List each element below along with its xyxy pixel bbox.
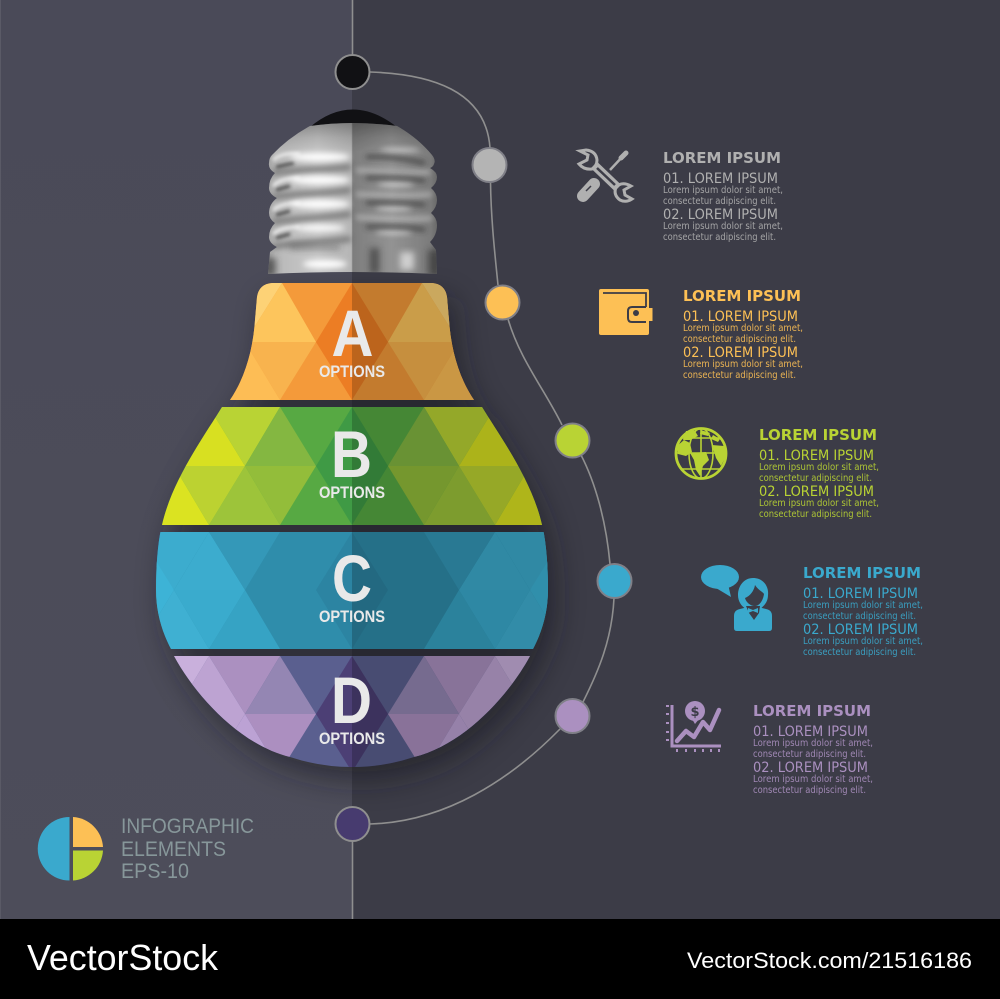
label D: OPTIONS: [319, 729, 385, 748]
text block 1: Lorem ipsum dolor sit amet,: [663, 221, 783, 232]
label D: D: [331, 663, 372, 737]
text block 5: LOREM IPSUM: [753, 702, 871, 720]
text block 2: LOREM IPSUM: [683, 287, 801, 305]
label C: [319, 541, 385, 626]
node: purple: [556, 699, 590, 733]
text block 4: consectetur adipiscing elit.: [803, 611, 916, 622]
text block 4: [803, 564, 923, 658]
background: right panel: [352, 0, 1000, 919]
metal screw base: [268, 123, 437, 274]
bulb shadow: [164, 297, 556, 781]
text block 1: LOREM IPSUM: [663, 149, 781, 167]
node: gray: [472, 148, 506, 182]
text block 3: Lorem ipsum dolor sit amet,: [759, 462, 879, 473]
text block 5: 01. LOREM IPSUM: [753, 724, 868, 740]
icon: legend pie: [38, 817, 103, 880]
text block 4: LOREM IPSUM: [803, 564, 921, 582]
legend text: INFOGRAPHIC: [121, 815, 254, 838]
text block 2: consectetur adipiscing elit.: [683, 334, 796, 345]
text block 2: Lorem ipsum dolor sit amet,: [683, 323, 803, 334]
icon: person with speech bubble: [701, 565, 772, 631]
label A: A: [332, 296, 374, 370]
text block 2: Lorem ipsum dolor sit amet,: [683, 359, 803, 370]
text block 5: Lorem ipsum dolor sit amet,: [753, 774, 873, 785]
text block 3: Lorem ipsum dolor sit amet,: [759, 498, 879, 509]
light bulb socket: [264, 110, 442, 278]
bulb band A: [230, 283, 474, 400]
label D: [319, 663, 385, 748]
label B: OPTIONS: [319, 483, 385, 502]
text block 5: Lorem ipsum dolor sit amet,: [753, 738, 873, 749]
left grooves: [272, 167, 351, 247]
text block 5: consectetur adipiscing elit.: [753, 785, 866, 796]
text block 2: consectetur adipiscing elit.: [683, 370, 796, 381]
bulb band B: [162, 407, 542, 525]
label A: OPTIONS: [319, 362, 385, 381]
legend text: EPS-10: [121, 860, 189, 883]
text block 2: 01. LOREM IPSUM: [683, 309, 798, 325]
text block 4: Lorem ipsum dolor sit amet,: [803, 636, 923, 647]
bulb band C: [156, 532, 548, 649]
label A: [319, 296, 385, 381]
text block 5: consectetur adipiscing elit.: [753, 749, 866, 760]
legend text: [121, 815, 254, 883]
node: top black: [336, 55, 370, 89]
node: orange: [486, 286, 520, 320]
text block 4: consectetur adipiscing elit.: [803, 647, 916, 658]
text block 3: LOREM IPSUM: [759, 426, 877, 444]
text block 2: [683, 287, 803, 381]
text block 3: 02. LOREM IPSUM: [759, 484, 874, 500]
footer bar: [0, 919, 1000, 999]
icon: growth chart: $: [690, 705, 700, 720]
text block 1: Lorem ipsum dolor sit amet,: [663, 185, 783, 196]
background: left panel: [0, 0, 352, 919]
text block 5: [753, 702, 873, 796]
icon: wallet: [599, 289, 652, 335]
right half: [352, 123, 437, 274]
collar shading: [264, 246, 440, 276]
text block 4: Lorem ipsum dolor sit amet,: [803, 600, 923, 611]
timeline connector line: [352, 0, 614, 919]
label C: OPTIONS: [319, 607, 385, 626]
text block 1: consectetur adipiscing elit.: [663, 196, 776, 207]
node: bottom indigo: [336, 807, 370, 841]
socket contact dome: [310, 110, 397, 127]
text block 4: 02. LOREM IPSUM: [803, 622, 918, 638]
text block 1: 02. LOREM IPSUM: [663, 207, 778, 223]
icon: growth chart: [666, 701, 721, 752]
watermark right: VectorStock.com/21516186: [687, 948, 972, 973]
icon: globe: [676, 428, 726, 478]
text block 4: 01. LOREM IPSUM: [803, 586, 918, 602]
text block 3: 01. LOREM IPSUM: [759, 448, 874, 464]
bulb band D: [174, 656, 530, 767]
icon: tools: [579, 150, 632, 201]
label B: [319, 417, 385, 502]
label B: B: [331, 417, 372, 491]
legend text: ELEMENTS: [121, 838, 226, 861]
text block 5: 02. LOREM IPSUM: [753, 760, 868, 776]
node: blue: [598, 564, 632, 598]
text block 3: [759, 426, 879, 520]
watermark left: VectorStock: [27, 937, 219, 978]
text block 2: 02. LOREM IPSUM: [683, 345, 798, 361]
text block 1: 01. LOREM IPSUM: [663, 171, 778, 187]
label C: C: [332, 541, 372, 615]
text block 3: consectetur adipiscing elit.: [759, 473, 872, 484]
text block 1: consectetur adipiscing elit.: [663, 232, 776, 243]
text block 3: consectetur adipiscing elit.: [759, 509, 872, 520]
text block 1: [663, 149, 783, 243]
node: green: [556, 424, 590, 458]
